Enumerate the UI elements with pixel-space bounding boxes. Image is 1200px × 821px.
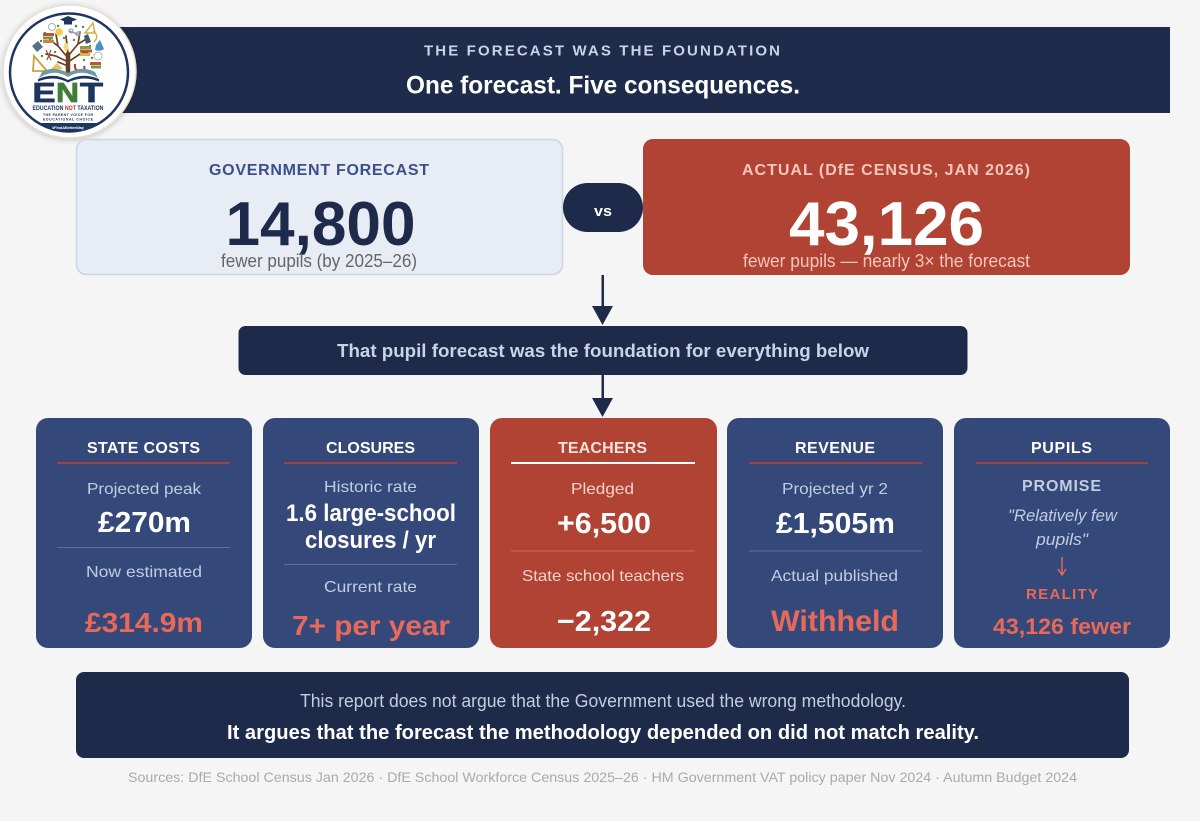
logo tagline: THE PARENT VOICE FOR	[43, 113, 93, 117]
actual label: ACTUAL (DfE CENSUS, JAN 2026)	[742, 162, 1030, 179]
closures heading: CLOSURES	[326, 440, 415, 457]
panel: government forecast	[76, 140, 562, 274]
conclusion panel	[76, 672, 1129, 758]
arrow: comparison to foundation	[592, 275, 613, 325]
promise quote	[1008, 506, 1119, 549]
actual published: Actual published	[771, 568, 898, 585]
current rate: Current rate	[324, 579, 417, 596]
state costs heading: STATE COSTS	[87, 440, 200, 457]
teachers heading: TEACHERS	[558, 440, 647, 457]
reality number: 43,126 fewer	[993, 614, 1131, 639]
promise quote: pupils"	[1035, 530, 1089, 549]
logo open book	[38, 69, 99, 82]
panel: revenue: £1,505m	[776, 508, 895, 540]
historic rate: Historic rate	[324, 479, 417, 496]
logo tagline	[43, 113, 94, 122]
panel: closures: 7+ per year	[292, 610, 450, 641]
now estimated: Now estimated	[86, 564, 202, 581]
forecast label: GOVERNMENT FORECAST	[209, 162, 429, 179]
conclusion first line: This report does not argue that the Government used the wrong methodology.	[300, 691, 906, 711]
logo tagline: EDUCATIONAL CHOICE	[43, 118, 94, 122]
title: One forecast. Five consequences.	[406, 72, 800, 100]
panel: closures	[263, 418, 479, 648]
actual number: 43,126	[789, 190, 984, 259]
logo hashtag band: #FindABetterWay	[52, 125, 85, 130]
header banner	[36, 27, 1170, 113]
logo badge: Education Not Taxation	[0, 5, 140, 138]
forecast note: fewer pupils (by 2025–26)	[221, 251, 417, 271]
panel: revenue	[727, 418, 943, 648]
logo leaves	[40, 25, 93, 61]
state school teachers: State school teachers	[522, 568, 684, 585]
promise quote: "Relatively few	[1008, 506, 1119, 525]
panel: pupils	[954, 418, 1170, 648]
conclusion second line: It argues that the forecast the methodology depended on did not match reality.	[227, 722, 979, 744]
logo ENT letters	[32, 77, 103, 108]
foundation banner: That pupil forecast was the foundation for everything below	[337, 341, 870, 361]
vs badge: vs	[594, 203, 612, 220]
pledged: Pledged	[571, 481, 634, 498]
logo icons	[32, 16, 104, 71]
arrow: promise to reality	[1058, 557, 1066, 575]
logo ENT letters: N	[56, 77, 79, 108]
vs badge	[563, 183, 643, 232]
panel: actual census	[643, 139, 1130, 275]
projected year 2: Projected yr 2	[782, 481, 888, 498]
logo ENT letters: T	[80, 77, 103, 108]
panel: closures: 1.6 large-school	[286, 500, 456, 527]
forecast number: 14,800	[226, 190, 416, 259]
arrow: foundation to consequences	[592, 375, 613, 417]
panel: teachers	[490, 418, 717, 648]
panel: teachers: +6,500	[557, 508, 651, 540]
sources: Sources: DfE School Census Jan 2026 · DfE School Workforce Census 2025–26 · HM Government VAT policy paper Nov 2024 · Autumn Budget 2024	[128, 769, 1077, 785]
panel: teachers: −2,322	[557, 606, 651, 638]
actual note: fewer pupils — nearly 3× the forecast	[743, 251, 1030, 271]
reality label: REALITY	[1026, 586, 1098, 603]
logo ENT letters: E	[32, 77, 56, 108]
panel: state costs: £270m	[98, 507, 191, 539]
logo tree	[46, 32, 88, 74]
pupils heading: PUPILS	[1031, 440, 1092, 457]
panel: closures: closures / yr	[305, 527, 436, 554]
logo wordmark: EDUCATION NOT TAXATION	[32, 106, 104, 112]
revenue heading: REVENUE	[795, 440, 875, 457]
promise label: PROMISE	[1022, 478, 1101, 495]
panel: revenue: Withheld	[771, 605, 899, 638]
foundation banner	[238, 326, 968, 375]
panel: state costs: £314.9m	[85, 607, 203, 638]
projected peak: Projected peak	[87, 481, 202, 498]
panel: state costs	[36, 418, 252, 648]
header eyebrow: THE FORECAST WAS THE FOUNDATION	[424, 42, 780, 60]
